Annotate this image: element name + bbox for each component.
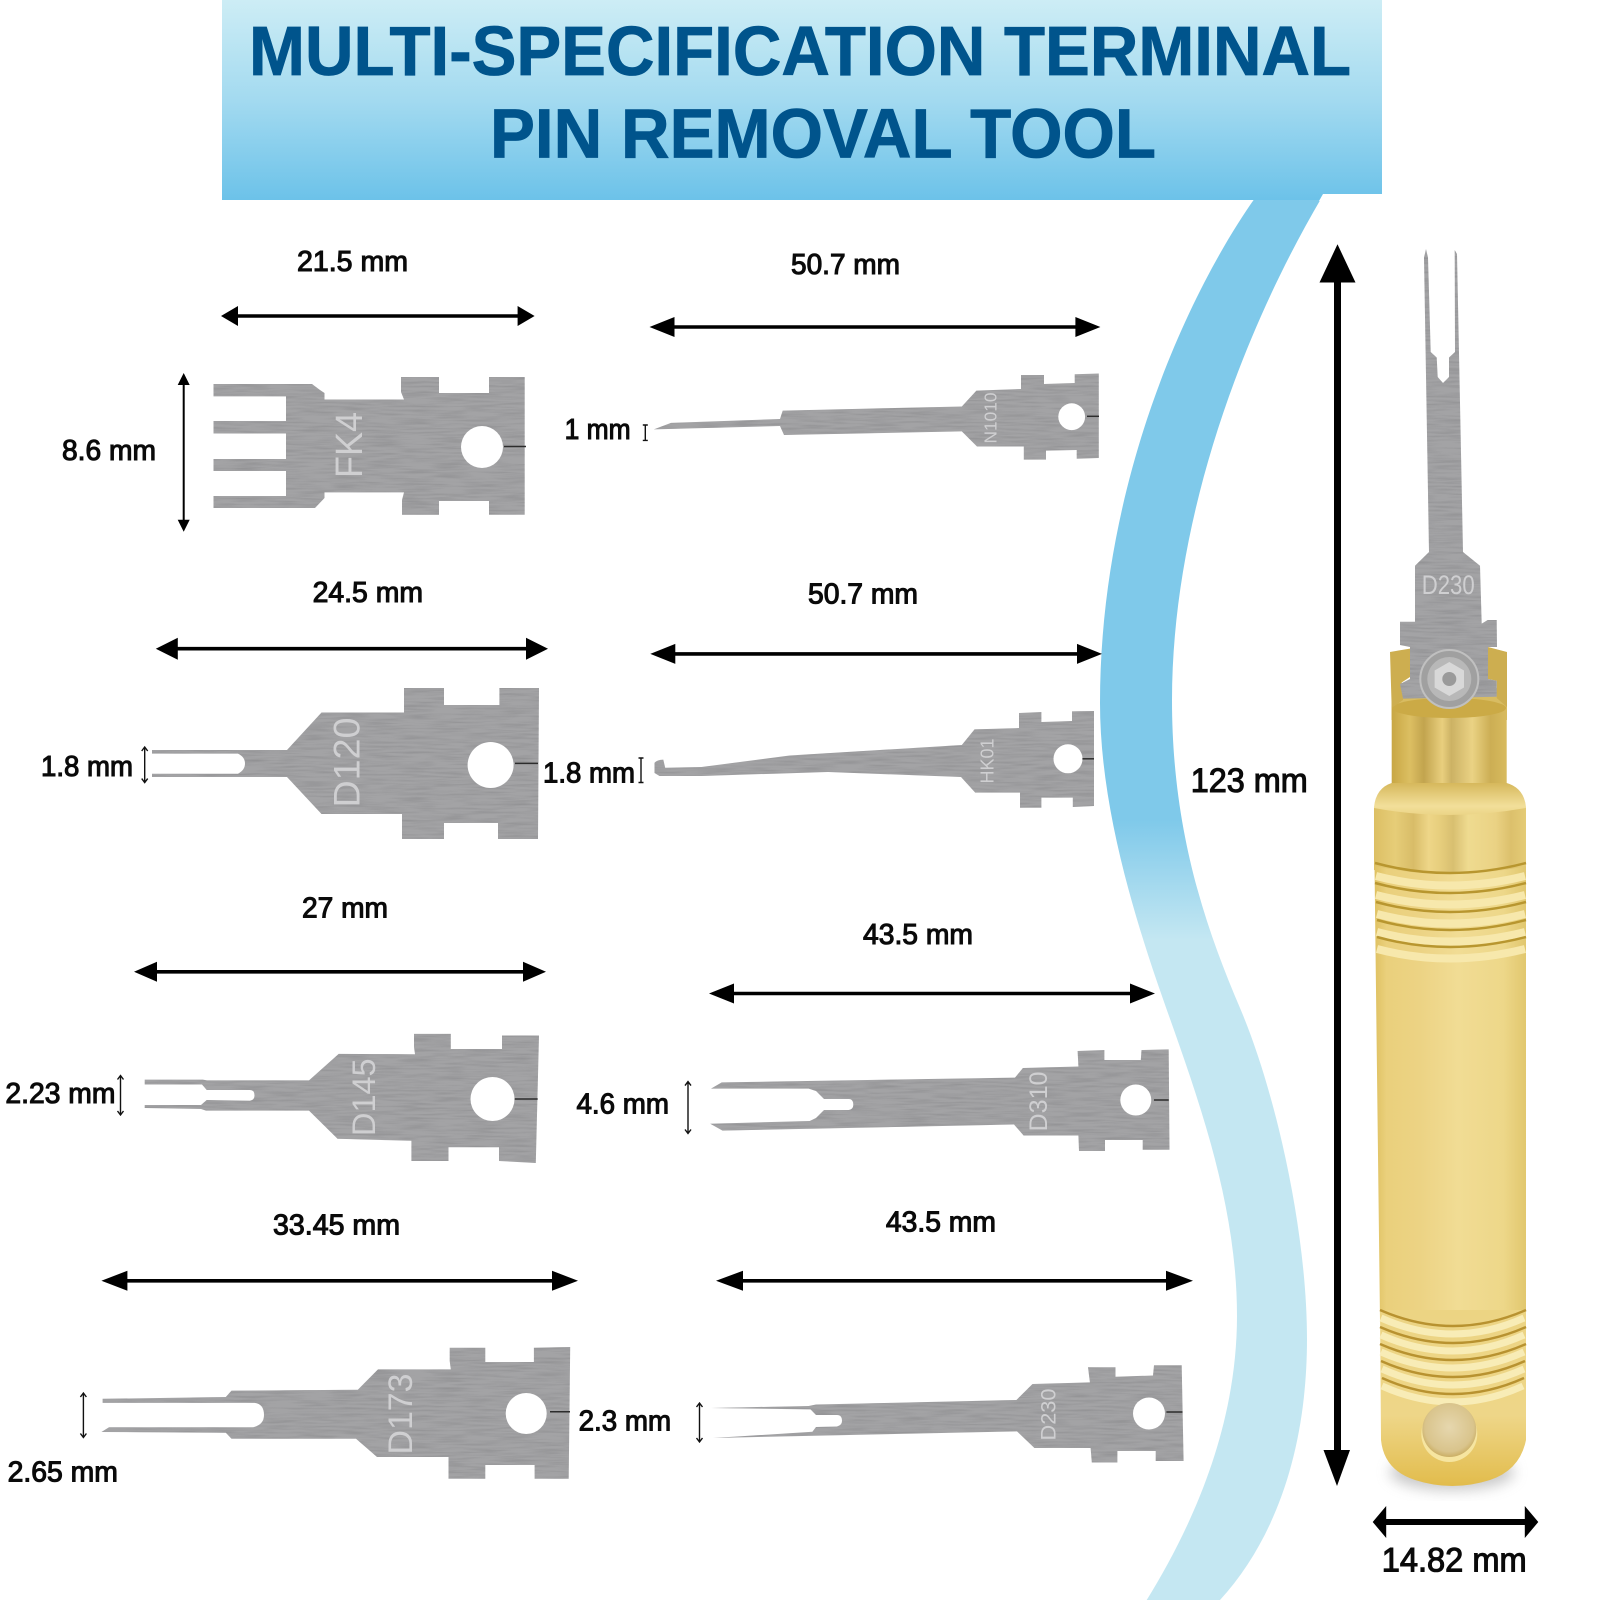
- blade: D230: D230: [1036, 1388, 1060, 1440]
- dimension label: 2.3 mm: 2.3 mm: [579, 1406, 671, 1438]
- marker: 1.8 mm left: [142, 747, 148, 783]
- blade: D145: [145, 1034, 539, 1163]
- dimension label: 123 mm: 123 mm: [1191, 762, 1308, 800]
- arrow: 21.5 mm width: [221, 306, 535, 326]
- title line 2: PIN REMOVAL TOOL: [490, 94, 1156, 172]
- blade: D173: [101, 1347, 570, 1479]
- arrow: 33.45 mm: [101, 1271, 578, 1291]
- blade: N1010: [654, 374, 1099, 460]
- handle shadow: [1390, 1454, 1514, 1490]
- dimension label: 14.82 mm: 14.82 mm: [1382, 1542, 1527, 1580]
- steel blade on tool: [1400, 249, 1497, 699]
- dimension label: 43.5 mm lower: 43.5 mm: [886, 1206, 996, 1238]
- brass clamp ears: [1390, 647, 1507, 708]
- dimension label: 2.65 mm: 2.65 mm: [8, 1457, 118, 1489]
- upper ring section: [1375, 863, 1526, 958]
- arrow: 43.5 mm upper: [709, 984, 1155, 1004]
- arrow: 123 mm height: [1320, 244, 1356, 1486]
- arrow: 50.7 mm second: [650, 644, 1102, 664]
- handle shoulder: [1374, 783, 1526, 825]
- dimension label: 21.5 mm: 21.5 mm: [297, 246, 408, 278]
- arrow: 8.6 mm height: [178, 373, 190, 532]
- blade: D310: [710, 1049, 1170, 1151]
- dimension label: 4.6 mm: 4.6 mm: [576, 1088, 669, 1120]
- title line 1: MULTI-SPECIFICATION TERMINAL: [249, 12, 1351, 90]
- blade: HK01: HK01: [978, 738, 998, 784]
- marker: 2.3 mm: [696, 1403, 702, 1442]
- dimension label: 1.8 mm right: 1.8 mm: [543, 758, 635, 790]
- dimension label: 1.8 mm left: 1.8 mm: [41, 751, 133, 783]
- brass clamp base: [1392, 688, 1507, 720]
- dimension label: 50.7 mm second: 50.7 mm: [808, 579, 918, 611]
- handle base: [1380, 1310, 1526, 1486]
- upper handle body: [1374, 808, 1526, 879]
- dimension label: 1 mm: 1 mm: [565, 414, 631, 446]
- clamp screw: [1420, 650, 1478, 708]
- handle cross hole: [1421, 1403, 1477, 1462]
- blade: D230: [711, 1365, 1184, 1462]
- blade marking: D230: [1422, 570, 1475, 600]
- tool: gold handle with D230 blade: [1374, 249, 1526, 1490]
- blade: D145: D145: [346, 1058, 382, 1136]
- blade: D120: D120: [326, 718, 368, 808]
- dimension label: 43.5 mm upper: 43.5 mm: [863, 919, 973, 951]
- dimension label: 50.7 mm top: 50.7 mm: [791, 249, 900, 281]
- lower ring section: [1380, 1310, 1526, 1402]
- arrow: 43.5 mm lower: [716, 1271, 1193, 1291]
- dimension label: 2.23 mm: 2.23 mm: [5, 1078, 115, 1110]
- dimension label: 8.6 mm: 8.6 mm: [62, 435, 156, 467]
- blade: N1010: N1010: [980, 392, 1000, 444]
- dimension label: 27 mm: 27 mm: [302, 892, 388, 924]
- curved blue wave background: [1100, 197, 1322, 1600]
- marker: 2.23 mm: [118, 1076, 124, 1115]
- arrow: 24.5 mm: [156, 638, 548, 660]
- blade: D173: D173: [382, 1374, 420, 1454]
- blade: D310: D310: [1025, 1071, 1053, 1132]
- blade: HK01: [654, 711, 1094, 808]
- blade: FK4: FK4: [329, 412, 371, 478]
- marker: 1.8 mm right: [638, 758, 644, 782]
- arrow: 27 mm: [134, 962, 546, 982]
- marker: 2.65 mm: [80, 1393, 86, 1438]
- lower handle body: [1374, 866, 1526, 1320]
- title banner: [222, 0, 1382, 201]
- blade: FK4: [214, 377, 526, 515]
- dimension label: 33.45 mm: 33.45 mm: [273, 1210, 400, 1242]
- blade: D120: [152, 688, 539, 839]
- marker: 1 mm: [643, 425, 648, 440]
- dimension label: 24.5 mm: 24.5 mm: [313, 577, 423, 609]
- marker: 4.6 mm: [685, 1082, 691, 1134]
- arrow: 14.82 mm width: [1373, 1506, 1538, 1538]
- handle collar: [1392, 706, 1507, 800]
- arrow: 50.7 mm top: [650, 317, 1100, 337]
